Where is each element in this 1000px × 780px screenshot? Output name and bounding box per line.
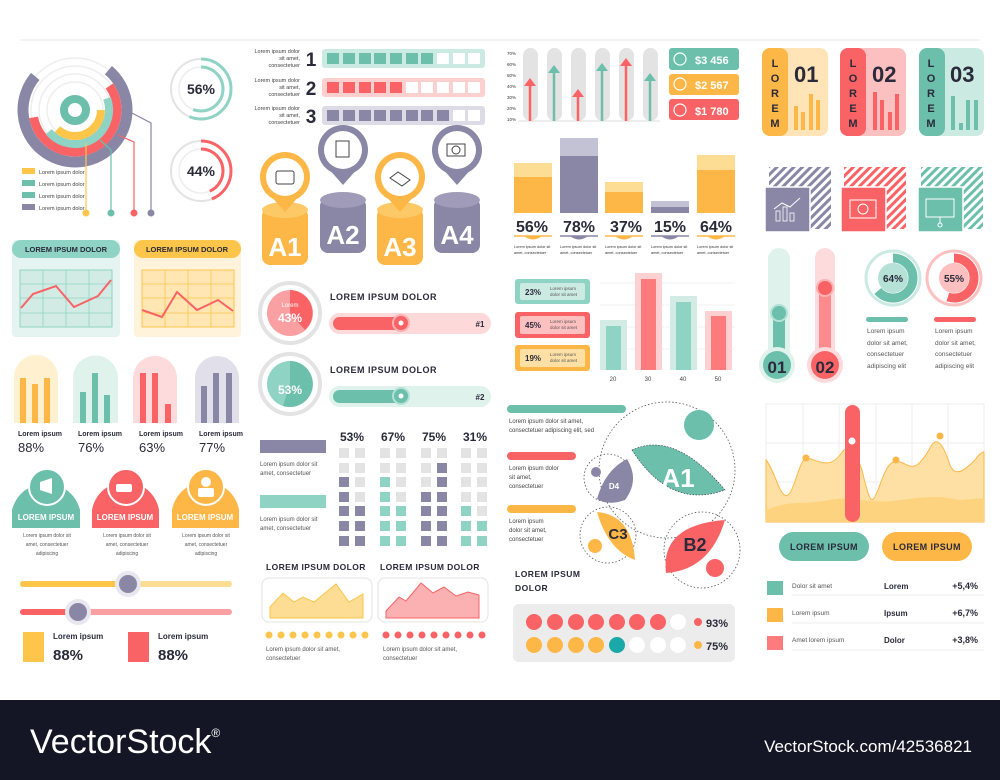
venn diagram: D4	[609, 482, 620, 491]
waffle chart: amet, consectetuer	[260, 471, 311, 477]
area chart yellow	[262, 562, 372, 662]
stacked bars with percentages: amet, consectetuer	[514, 251, 547, 255]
panel: teal line chart	[12, 240, 120, 337]
waffle chart: 53%	[340, 430, 364, 444]
donut 55%: Lorem ipsum	[935, 328, 973, 335]
donut 64%: Lorem ipsum	[867, 328, 905, 335]
progress rows: 1	[306, 50, 317, 71]
panel: yellow line chart	[134, 240, 241, 337]
thermometers	[759, 248, 843, 383]
buttons: LOREM IPSUM	[790, 542, 858, 552]
donut 55%: adipiscing elit	[935, 363, 974, 370]
LOREM cards: L	[850, 58, 857, 70]
legend squares 88%: 88%	[53, 647, 83, 664]
donut 64%: adipiscing elit	[867, 363, 906, 370]
legend squares 88%: Lorem ipsum	[53, 632, 103, 641]
progress rows: sit amet,	[279, 85, 300, 91]
legend cards: 45%	[525, 321, 541, 330]
LOREM cards: O	[927, 73, 936, 85]
venn text blocks: dolor sit amet,	[509, 528, 547, 534]
panel: yellow line chart: LOREM IPSUM DOLOR	[146, 245, 229, 254]
buttons	[779, 532, 972, 561]
LOREM cards: L	[772, 58, 779, 70]
icon panels: amet, consectetuer	[26, 542, 69, 548]
icon panels	[12, 469, 239, 557]
legend squares 88%: Lorem ipsum	[158, 632, 208, 641]
dot rating panel: 93%	[706, 618, 728, 630]
progress rows: 3	[306, 107, 316, 128]
area chart red: LOREM IPSUM DOLOR	[380, 562, 480, 572]
data table: Ipsum	[884, 609, 908, 618]
donut 44%: 44%	[187, 163, 216, 179]
bar chart 20-50: 50	[715, 377, 722, 383]
bar chart 20-50	[600, 273, 735, 383]
dot rating panel	[513, 604, 735, 662]
stacked bars with percentages: amet, consectetuer	[605, 251, 638, 255]
legend cards: dolor sit amet	[550, 358, 578, 363]
arrow column chart: 30%	[507, 95, 516, 100]
donut 56%: 56%	[187, 81, 216, 97]
donut 55%: consectetuer	[935, 351, 973, 358]
stacked bars with percentages: 15%	[654, 219, 686, 236]
pins A1-A4: A1	[268, 232, 302, 262]
bar chart 20-50: 20	[610, 377, 617, 383]
stacked bars with percentages: 56%	[516, 219, 548, 236]
pins A1-A4	[260, 125, 482, 265]
progress rows: 2	[306, 79, 316, 100]
donut 64%: consectetuer	[867, 351, 905, 358]
legend cards: 19%	[525, 354, 541, 363]
icon panels: Lorem ipsum dolor sit	[23, 533, 72, 539]
venn text blocks: consectetuer	[509, 537, 543, 543]
money boxes: $1 780	[695, 106, 729, 118]
waffle chart: Lorem ipsum dolor sit	[260, 517, 318, 523]
small bar cards: Lorem ipsum	[18, 431, 62, 438]
thermometers: 02	[816, 358, 834, 377]
progress rows: sit amet,	[279, 56, 300, 62]
pins A1-A4: A4	[440, 220, 474, 250]
icon panels: LOREM IPSUM	[18, 513, 75, 522]
data table: Lorem ipsum	[792, 610, 830, 617]
donut 55%	[927, 251, 981, 370]
LOREM cards: M	[770, 118, 780, 130]
data table: +6,7%	[952, 608, 978, 618]
small bar cards: 63%	[139, 440, 165, 455]
legend cards: dolor sit amet	[550, 292, 578, 297]
radial chart: Lorem ipsum dolor	[39, 194, 85, 200]
progress donut 43%	[260, 283, 491, 343]
footer: VectorStock.com/42536821	[764, 737, 972, 756]
donut 55%: 55%	[944, 274, 964, 285]
legend cards: Lorem ipsum	[550, 286, 576, 291]
LOREM cards: E	[927, 103, 935, 115]
legend cards: dolor sit amet	[550, 325, 578, 330]
venn text blocks: Lorem ipsum dolor	[509, 466, 559, 472]
stacked bars with percentages: amet, consectetuer	[560, 251, 593, 255]
venn text blocks: consectetuer adipiscing elit, sed	[509, 428, 594, 434]
icon panels: adipiscing	[36, 551, 58, 557]
area chart red	[378, 562, 488, 662]
icon panels: adipiscing	[116, 551, 138, 557]
stacked bars with percentages: Lorem ipsum dolor sit	[514, 245, 551, 249]
pins A1-A4: A2	[326, 220, 360, 250]
waffle chart: 31%	[463, 430, 487, 444]
venn diagram: A1	[661, 463, 695, 493]
progress donut 43%: #1	[476, 320, 485, 329]
progress rows: Lorem ipsum dolor	[254, 106, 300, 112]
small bar cards: 88%	[18, 440, 44, 455]
bar chart 20-50: 30	[645, 377, 652, 383]
data table: Lorem	[884, 582, 908, 591]
legend cards: Lorem ipsum	[550, 319, 576, 324]
stacked bars with percentages	[514, 138, 735, 255]
LOREM cards	[762, 48, 984, 136]
icon panels: amet, consectetuer	[185, 542, 228, 548]
radial chart	[2, 37, 154, 216]
data table: Dolor sit amet	[792, 583, 832, 590]
progress donut 43%: Lorem	[281, 303, 299, 309]
donut 56%	[171, 59, 231, 119]
venn diagram: B2	[683, 535, 707, 555]
legend cards: Lorem ipsum	[550, 352, 576, 357]
stacked bars with percentages: amet, consectetuer	[697, 251, 730, 255]
icon panels: Lorem ipsum dolor sit	[103, 533, 152, 539]
stacked bars with percentages: 64%	[700, 219, 732, 236]
footer	[0, 700, 1000, 780]
icon panels: LOREM IPSUM	[97, 513, 154, 522]
arrow column chart: 60%	[507, 62, 516, 67]
area chart yellow: consectetuer	[266, 656, 300, 662]
LOREM cards: 03	[950, 62, 974, 87]
icon panels: amet, consectetuer	[106, 542, 149, 548]
icon panels: adipiscing	[195, 551, 217, 557]
stacked bars with percentages: 78%	[563, 219, 595, 236]
icon panels: LOREM IPSUM	[177, 513, 234, 522]
progress rows: Lorem ipsum dolor	[254, 78, 300, 84]
small bar cards: Lorem ipsum	[78, 431, 122, 438]
money boxes	[669, 48, 739, 120]
legend cards: 23%	[525, 288, 541, 297]
donut 64%: dolor sit amet,	[867, 340, 908, 347]
LOREM cards: O	[771, 73, 780, 85]
data table: +5,4%	[952, 581, 978, 591]
LOREM cards: E	[849, 103, 857, 115]
donut 55%: dolor sit amet,	[935, 340, 976, 347]
venn text blocks: consectetuer	[509, 484, 543, 490]
waffle chart: 67%	[381, 430, 405, 444]
radial chart: Lorem ipsum dolor	[39, 182, 85, 188]
waffle chart: amet, consectetuer	[260, 526, 311, 532]
sliders	[20, 571, 232, 625]
footer: ®	[211, 726, 220, 740]
radial chart: Lorem ipsum dolor	[39, 206, 85, 212]
small bar cards	[14, 355, 243, 455]
venn diagram: C3	[608, 526, 628, 543]
LOREM cards: M	[926, 118, 936, 130]
progress rows	[254, 49, 485, 128]
arrow column chart: 50%	[507, 73, 516, 78]
waffle chart	[260, 430, 487, 546]
progress donut 53%: 53%	[278, 383, 302, 397]
LOREM cards: R	[927, 88, 935, 100]
data table	[767, 581, 984, 650]
footer: VectorStock	[30, 723, 211, 761]
progress donut 43%: LOREM IPSUM DOLOR	[330, 292, 437, 302]
area chart yellow: LOREM IPSUM DOLOR	[266, 562, 366, 572]
stacked bars with percentages: amet, consectetuer	[651, 251, 684, 255]
data table: +3,8%	[952, 635, 978, 645]
progress rows: consectetuer	[268, 120, 300, 126]
radial chart: Lorem ipsum dolor	[39, 170, 85, 176]
progress donut 53%: LOREM IPSUM DOLOR	[330, 365, 437, 375]
legend squares 88%: 88%	[158, 647, 188, 664]
LOREM cards: O	[849, 73, 858, 85]
waffle chart: Lorem ipsum dolor sit	[260, 462, 318, 468]
wave chart	[766, 404, 984, 522]
LOREM cards: E	[771, 103, 779, 115]
legend squares 88%	[23, 632, 208, 664]
thermometers: 01	[768, 358, 786, 377]
legend cards	[515, 279, 590, 371]
progress donut 53%: #2	[476, 393, 485, 402]
pins A1-A4: A3	[383, 232, 417, 262]
venn diagram	[580, 402, 740, 588]
venn text blocks: LOREM IPSUM	[515, 569, 580, 579]
arrow column chart	[507, 48, 660, 122]
donut 44%	[171, 141, 231, 201]
bar chart 20-50: 40	[680, 377, 687, 383]
icon panels: Lorem ipsum dolor sit	[182, 533, 231, 539]
waffle chart: 75%	[422, 430, 446, 444]
venn text blocks: DOLOR	[515, 583, 548, 593]
progress donut 43%: 43%	[278, 311, 302, 325]
LOREM cards: R	[849, 88, 857, 100]
buttons: LOREM IPSUM	[893, 542, 961, 552]
progress donut 53%	[260, 354, 491, 414]
LOREM cards: 02	[872, 62, 896, 87]
stacked bars with percentages: Lorem ipsum dolor sit	[605, 245, 642, 249]
area chart yellow: Lorem ipsum dolor sit amet,	[266, 647, 340, 653]
venn text blocks: sit amet,	[509, 475, 532, 481]
LOREM cards: L	[928, 58, 935, 70]
progress rows: consectetuer	[268, 63, 300, 69]
LOREM cards: 01	[794, 62, 818, 87]
donut 64%	[866, 251, 920, 370]
arrow column chart: 70%	[507, 51, 516, 56]
arrow column chart: 40%	[507, 84, 516, 89]
stacked bars with percentages: 37%	[610, 219, 642, 236]
LOREM cards: M	[848, 118, 858, 130]
money boxes: $2 567	[695, 80, 729, 92]
data table: Amet lorem ipsum	[792, 637, 844, 644]
stacked bars with percentages: Lorem ipsum dolor sit	[560, 245, 597, 249]
progress rows: consectetuer	[268, 92, 300, 98]
donut 64%: 64%	[883, 274, 903, 285]
stacked bars with percentages: Lorem ipsum dolor sit	[697, 245, 734, 249]
area chart red: consectetuer	[383, 656, 417, 662]
stacked bars with percentages: Lorem ipsum dolor sit	[651, 245, 688, 249]
small bar cards: Lorem ipsum	[199, 431, 243, 438]
arrow column chart: 10%	[507, 117, 516, 122]
small bar cards: 77%	[199, 440, 225, 455]
panel: teal line chart: LOREM IPSUM DOLOR	[25, 245, 108, 254]
area chart red: Lorem ipsum dolor sit amet,	[383, 647, 457, 653]
small bar cards: 76%	[78, 440, 104, 455]
venn text blocks	[507, 405, 626, 593]
LOREM cards: R	[771, 88, 779, 100]
money boxes: $3 456	[695, 55, 729, 67]
venn text blocks: Lorem ipsum	[509, 519, 544, 525]
dot rating panel: 75%	[706, 641, 728, 653]
progress rows: sit amet,	[279, 113, 300, 119]
venn text blocks: Lorem ipsum dolor sit amet,	[509, 419, 583, 425]
arrow column chart: 20%	[507, 106, 516, 111]
progress rows: Lorem ipsum dolor	[254, 49, 300, 55]
small bar cards: Lorem ipsum	[139, 431, 183, 438]
data table: Dolor	[884, 636, 905, 645]
